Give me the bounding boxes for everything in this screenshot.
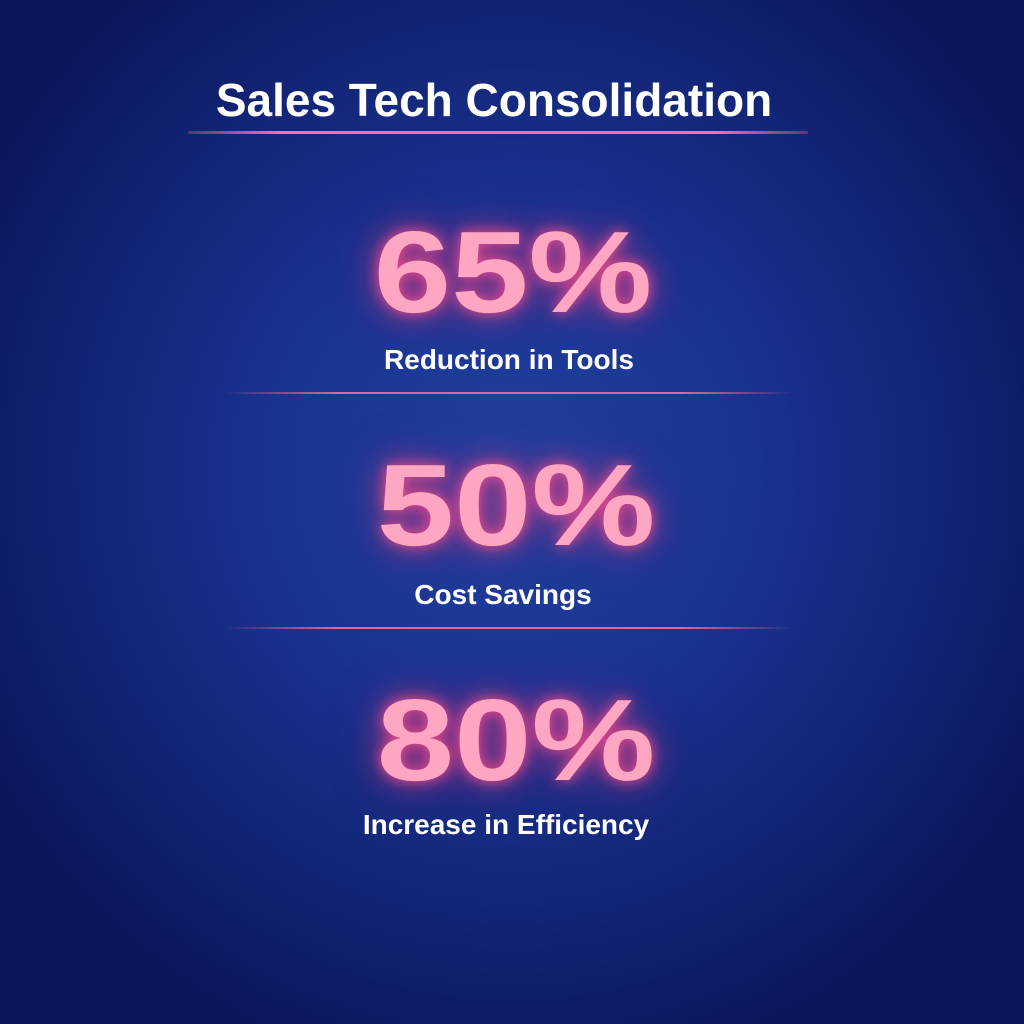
- title underline: [188, 131, 808, 134]
- title: Sales Tech Consolidation: [216, 74, 772, 126]
- number: 65%: 65%: [374, 207, 652, 337]
- label: Cost Savings: Cost Savings: [414, 579, 592, 610]
- label: Reduction in Tools: Reduction in Tools: [384, 344, 634, 375]
- number: 80%: 80%: [377, 675, 655, 805]
- label: Increase in Efficiency: Increase in Efficiency: [363, 809, 649, 840]
- number: 50%: 50%: [377, 440, 655, 570]
